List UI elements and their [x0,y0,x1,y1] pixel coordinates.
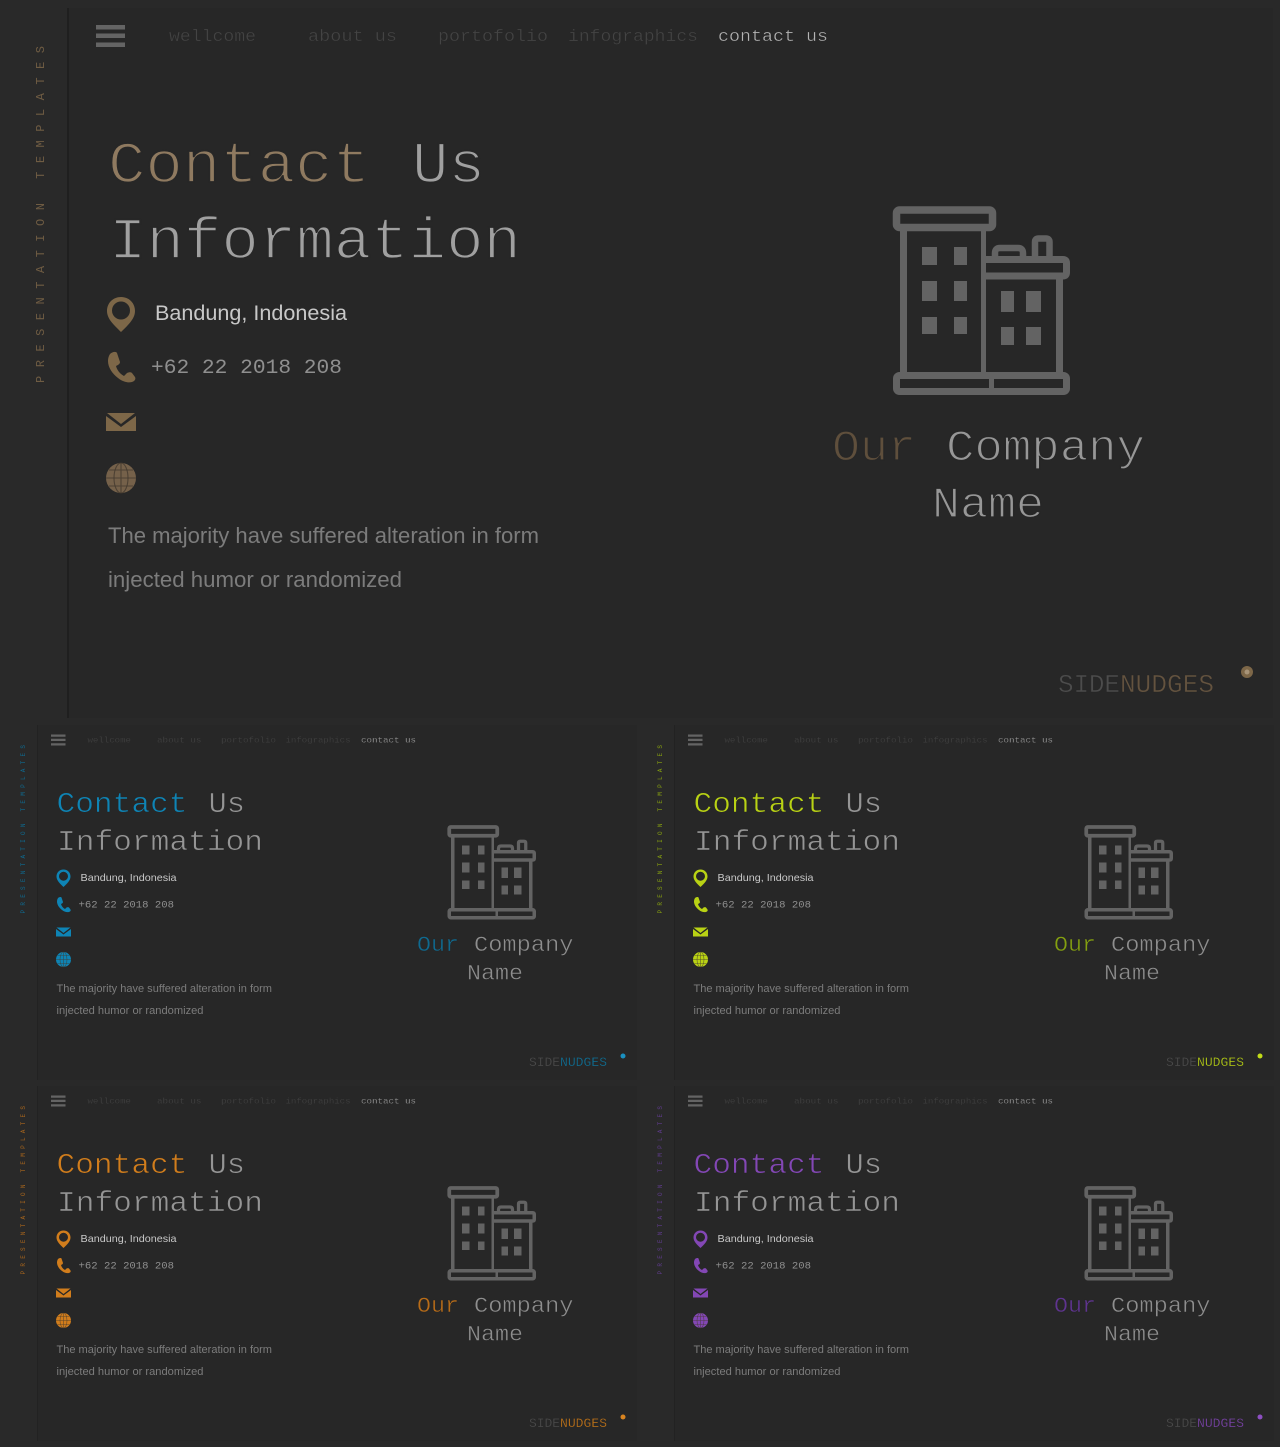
navigation [169,28,828,47]
navigation: contact us [998,1096,1053,1106]
brand: SIDE [1058,670,1120,700]
brand: NUDGES [1120,670,1214,700]
brand: SIDE [529,1055,560,1070]
navigation: portofolio [858,736,913,746]
navigation: portofolio [221,1096,276,1106]
icon: globe [56,1313,71,1328]
body text: The majority have suffered alteration in form [694,1344,909,1356]
company name: Our [832,424,916,474]
body text: The majority have suffered alteration in form [108,523,539,548]
navigation [88,1096,416,1106]
icon: building [896,210,1066,392]
icon: globe [693,1313,708,1328]
brand dot [1258,1054,1262,1058]
navigation: wellcome [88,1096,131,1106]
navigation [724,1096,1053,1106]
brand: NUDGES [560,1416,607,1431]
icon: menu [96,25,125,47]
brand dot [620,1054,626,1058]
brand: NUDGES [560,1055,607,1070]
company name: Company [1111,933,1210,958]
brand: NUDGES [1197,1416,1244,1431]
phone number: +62 22 2018 208 [78,1262,174,1272]
icon: mail [693,1288,708,1298]
title: Us [412,135,485,200]
address: Bandung, Indonesia [80,1233,177,1245]
title: Us [846,788,882,821]
body text: The majority have suffered alteration in form [56,983,272,995]
body text: injected humor or randomized [694,1366,840,1378]
title: Contact [108,135,370,200]
icon: menu [51,734,66,746]
navigation: about us [794,1096,838,1106]
company name: Our [417,933,459,958]
brand: NUDGES [1197,1055,1244,1070]
icon: location pin [694,1230,708,1248]
title: Information [694,1187,900,1220]
title: Information [57,1187,263,1220]
icon: phone [694,897,708,912]
navigation: about us [157,736,202,746]
navigation: about us [157,1096,202,1106]
icon: building [1086,1188,1171,1279]
sidebar label: PRESENTATION TEMPLATES [20,1102,27,1274]
company name: Our [1054,1294,1096,1319]
title: Us [208,788,245,821]
address: Bandung, Indonesia [718,1233,814,1245]
navigation [724,736,1053,746]
body text: injected humor or randomized [56,1366,204,1378]
icon: location pin [56,1230,70,1248]
brand: SIDE [1166,1055,1197,1070]
icon: menu [51,1096,66,1106]
title: Contact [56,1149,188,1182]
navigation: contact us [361,736,416,746]
navigation: infographics [286,736,350,746]
panel: lime slide [644,725,1274,1080]
company name: Company [474,933,574,958]
sidebar label: PRESENTATION TEMPLATES [34,38,48,383]
icon: building [1086,827,1171,918]
navigation: portofolio [858,1096,913,1106]
icon: mail [56,1288,71,1298]
navigation: infographics [286,1096,350,1106]
company name: Name [1104,962,1160,986]
company name: Name [467,962,523,986]
icon: building [449,1188,534,1279]
panel: orange slide [7,1086,637,1441]
navigation: contact us [361,1096,416,1106]
navigation: portofolio [221,736,276,746]
navigation: infographics [568,28,698,47]
address: Bandung, Indonesia [718,872,814,884]
navigation: contact us [718,28,828,47]
phone number: +62 22 2018 208 [151,357,342,380]
company name: Company [474,1294,574,1319]
brand dot [1241,666,1253,678]
phone number: +62 22 2018 208 [716,1262,811,1272]
icon: mail [693,928,708,936]
body text: injected humor or randomized [694,1005,840,1017]
icon: location pin [107,297,135,332]
navigation: wellcome [88,736,131,746]
phone number: +62 22 2018 208 [78,900,174,912]
icon: globe [56,952,71,967]
panel: main brown slide [8,8,1273,718]
body text: injected humor or randomized [56,1005,204,1017]
navigation: about us [794,736,838,746]
sidebar label: PRESENTATION TEMPLATES [657,741,664,914]
company name: Name [467,1322,523,1348]
brand: SIDE [1166,1416,1197,1431]
address: Bandung, Indonesia [80,872,177,884]
company name: Company [946,424,1145,474]
icon: building [449,827,534,918]
icon: location pin [694,870,708,887]
company name: Our [1054,933,1096,958]
body text: The majority have suffered alteration in form [694,983,909,995]
body text: injected humor or randomized [108,567,402,592]
navigation: about us [308,28,397,47]
title: Contact [694,1149,824,1182]
icon: phone [57,1258,71,1273]
sidebar label: PRESENTATION TEMPLATES [20,741,27,914]
sidebar label: PRESENTATION TEMPLATES [657,1102,664,1274]
icon: menu [688,734,702,746]
icon: mail [106,413,136,431]
title: Contact [56,788,188,821]
navigation: wellcome [724,1096,768,1106]
icon: mail [56,928,71,936]
body text: The majority have suffered alteration in form [56,1344,272,1356]
navigation: infographics [922,736,988,746]
company name: Company [1111,1294,1210,1319]
title: Us [846,1149,882,1182]
brand dot [620,1414,626,1420]
address: Bandung, Indonesia [155,302,347,325]
navigation: contact us [998,736,1053,746]
navigation [88,736,416,746]
brand dot [1258,1414,1262,1420]
icon: location pin [56,870,70,887]
title: Us [208,1149,245,1182]
title: Information [694,826,900,859]
icon: phone [108,352,135,382]
navigation: portofolio [438,28,548,47]
navigation: infographics [922,1096,988,1106]
title: Information [109,211,521,276]
phone number: +62 22 2018 208 [716,900,811,912]
icon: globe [693,952,708,967]
company name: Name [1104,1322,1160,1348]
icon: phone [694,1258,708,1273]
navigation: wellcome [169,28,256,47]
icon: phone [57,897,71,912]
icon: globe [106,463,136,493]
brand: SIDE [529,1416,560,1431]
company name: Our [417,1294,459,1319]
panel: blue slide [7,725,637,1080]
title: Contact [694,788,824,821]
company name: Name [932,481,1044,531]
navigation: wellcome [724,736,768,746]
title: Information [57,826,263,859]
icon: menu [688,1096,702,1106]
panel: purple slide [644,1086,1274,1441]
